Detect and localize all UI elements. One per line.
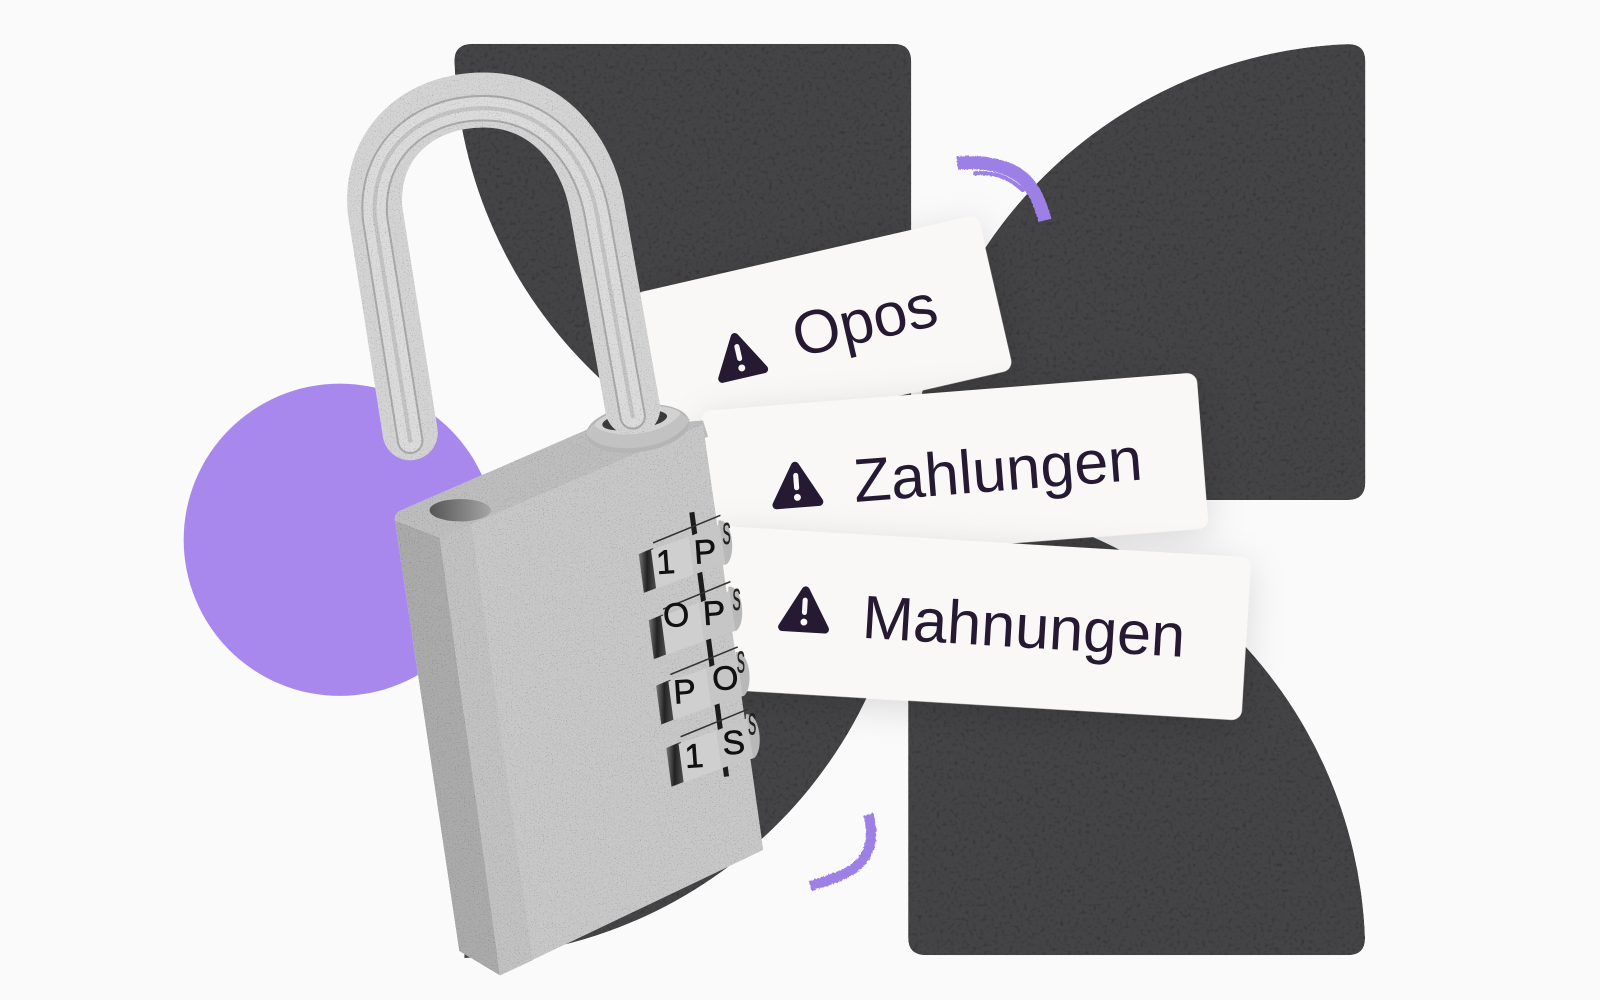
shape: top left quarter circle: [454, 44, 911, 501]
shape: bottom right quarter circle: [908, 498, 1365, 955]
shape: top right quarter circle: [909, 44, 1365, 500]
padlock: [375, 100, 763, 976]
letter fragment: S: [732, 583, 741, 617]
top face: [395, 420, 708, 538]
side face: [395, 520, 500, 976]
letter: P: [672, 673, 697, 712]
label: Zahlungen: Zahlungen: [851, 425, 1145, 515]
letter: O: [711, 660, 740, 699]
icon: warning triangle: [774, 464, 819, 505]
label: Opos: Opos: [786, 271, 943, 370]
card: Zahlungen: [701, 372, 1209, 567]
icon: warning triangle: [782, 589, 827, 629]
index line: [692, 512, 727, 777]
ring front lip: [586, 413, 690, 448]
label: Mahnungen: Mahnungen: [860, 583, 1187, 670]
dial row 4: [666, 707, 760, 787]
dial row 2: [649, 582, 742, 659]
digit: 1: [655, 544, 676, 582]
front bevel: [440, 524, 533, 976]
card content: Mahnungen: [781, 578, 1187, 670]
dark quarter-circle shapes: [454, 44, 1365, 958]
dial row 3: [656, 645, 750, 724]
keyhole: [430, 499, 491, 521]
brush stroke: top: [957, 162, 1045, 220]
shackle: [375, 100, 633, 441]
padlock body: [395, 420, 763, 976]
purple circle: [184, 384, 496, 696]
letter: P: [693, 533, 718, 572]
card: Mahnungen: [702, 526, 1251, 721]
letter fragment: S: [722, 516, 731, 550]
shape: bottom left quarter circle: [464, 501, 911, 958]
shackle ring: [583, 398, 693, 459]
dial row 1: [639, 515, 732, 593]
letter: P: [702, 595, 727, 633]
front face: [440, 424, 763, 976]
letter fragment: S: [748, 707, 756, 741]
card content: Opos: [709, 271, 943, 387]
letter fragment: S: [737, 645, 745, 679]
card content: Zahlungen: [772, 425, 1145, 521]
icon: warning triangle: [714, 332, 764, 379]
brush stroke: bottom: [810, 814, 871, 886]
letter: O: [662, 597, 691, 635]
card: Opos: [633, 215, 1013, 449]
letter: S: [721, 724, 746, 763]
digit: 1: [683, 738, 705, 776]
